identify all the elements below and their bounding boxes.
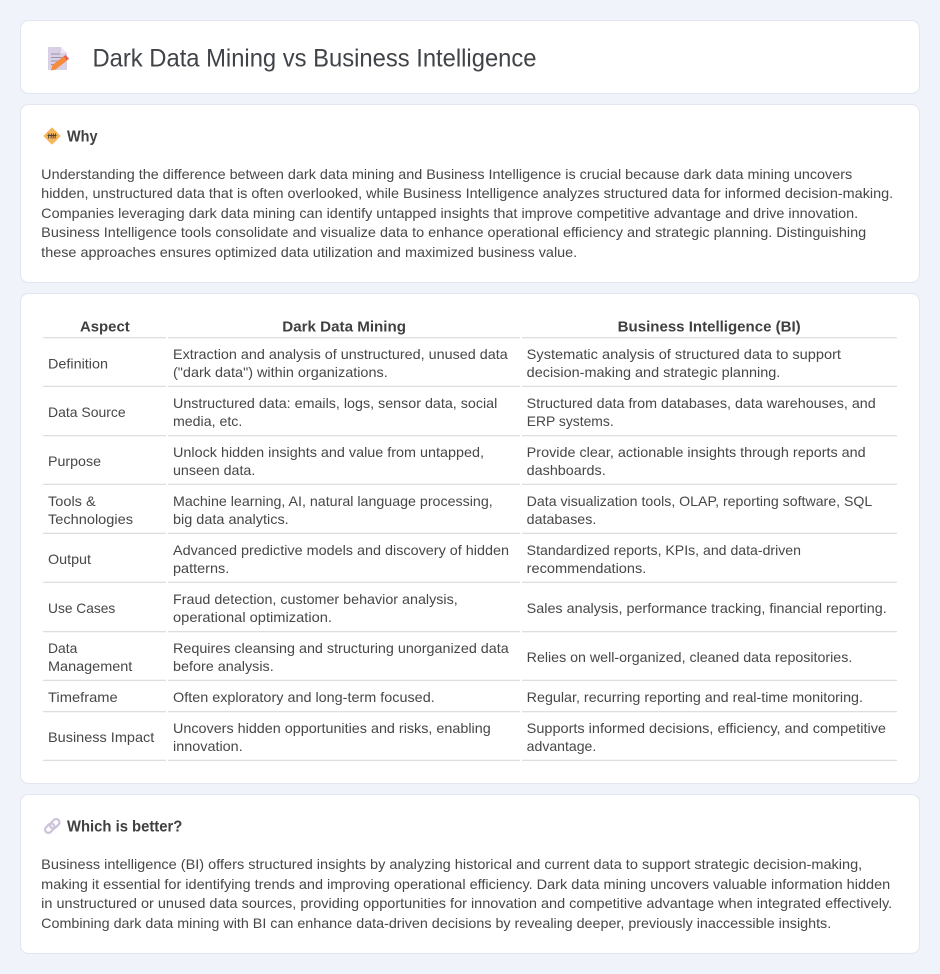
row: use cases <box>43 591 897 632</box>
row: definition <box>43 346 897 387</box>
row: definition: Definition <box>48 355 108 371</box>
row: timeframe: Regular, recurring reporting and real-time monitoring. <box>527 689 863 705</box>
row: use cases: Fraud detection, customer behavior analysis, <box>173 591 458 607</box>
icon: chain link <box>44 818 61 834</box>
row: data source: Data Source <box>48 404 126 420</box>
row: use cases: Sales analysis, performance tracking, financial reporting. <box>527 600 887 616</box>
row: output <box>43 542 897 583</box>
row: data management: Data <box>48 640 78 656</box>
row: purpose: unseen data. <box>173 462 255 478</box>
row: business impact <box>43 720 897 761</box>
row: definition: Extraction and analysis of unstructured, unused data <box>173 346 508 362</box>
row: data source <box>43 395 897 436</box>
text block: which is better paragraph: Business intelligence (BI) offers structured insights by analyzing historical and current data to support strategic decision-making, <box>41 856 862 872</box>
row: output: Standardized reports, KPIs, and data-driven <box>527 542 801 558</box>
heading: why: Why <box>67 129 98 146</box>
text block: which is better paragraph <box>41 856 892 931</box>
row: data source: media, etc. <box>173 413 242 429</box>
row: purpose: dashboards. <box>527 462 606 478</box>
text block: why paragraph: hidden, unstructured data that is often overlooked, while Business Intelligence analyzes structured data for informed decision-making. <box>41 185 893 201</box>
row: output: recommendations. <box>527 560 646 576</box>
row: tools and technologies: big data analytics. <box>173 511 289 527</box>
panel: title card <box>20 20 920 94</box>
text block: why paragraph: these approaches ensures optimized data utilization and maximized business value. <box>41 244 577 260</box>
row: purpose: Unlock hidden insights and value from untapped, <box>173 444 484 460</box>
text block: why paragraph <box>41 166 893 260</box>
row: purpose <box>43 444 897 485</box>
row: tools and technologies: databases. <box>527 511 596 527</box>
row: data management: Relies on well-organized, cleaned data repositories. <box>527 649 852 665</box>
row: data source: Structured data from databases, data warehouses, and <box>527 395 876 411</box>
row: tools and technologies: Machine learning, AI, natural language processing, <box>173 493 493 509</box>
row: timeframe <box>43 689 897 712</box>
row: tools and technologies <box>43 493 897 534</box>
table header: Business Intelligence (BI) <box>618 320 801 336</box>
row: output: Output <box>48 551 91 567</box>
row: purpose: Provide clear, actionable insights through reports and <box>527 444 866 460</box>
text block: which is better paragraph: in unstructured or unused data sources, providing opportunities for innovation and competitive advantage when integrated effectively. <box>41 895 892 911</box>
heading: which is better: Which is better? <box>67 819 182 836</box>
row: data management <box>43 640 897 681</box>
row: tools and technologies: Tools & <box>48 493 96 509</box>
row: business impact: Business Impact <box>48 729 154 745</box>
row: data source: Unstructured data: emails, logs, sensor data, social <box>173 395 497 411</box>
row: business impact: Supports informed decisions, efficiency, and competitive <box>527 720 886 736</box>
row: output: patterns. <box>173 560 229 576</box>
row: business impact: Uncovers hidden opportunities and risks, enabling <box>173 720 491 736</box>
panel: why <box>20 104 920 282</box>
row: timeframe: Timeframe <box>48 689 118 705</box>
table header <box>43 320 897 338</box>
row: timeframe: Often exploratory and long-term focused. <box>173 689 435 705</box>
row: definition: decision-making and strategic planning. <box>527 364 780 380</box>
panel: comparison table <box>20 294 920 784</box>
panel: which is better <box>20 794 920 954</box>
row: output: Advanced predictive models and discovery of hidden <box>173 542 509 558</box>
row: data management: before analysis. <box>173 658 274 674</box>
text block: why paragraph: Understanding the difference between dark data mining and Business Intelligence is crucial because dark data mining uncovers <box>41 166 852 182</box>
row: data source: ERP systems. <box>527 413 614 429</box>
row: business impact: advantage. <box>527 738 596 754</box>
row: tools and technologies: Data visualization tools, OLAP, reporting software, SQL <box>527 493 873 509</box>
icon: document with pencil <box>48 47 69 70</box>
text block: which is better paragraph: Combining dark data mining with BI can enhance data-driven decisions by revealing deeper, previously inaccessible insights. <box>41 915 831 931</box>
table header: Aspect <box>80 320 130 336</box>
row: tools and technologies: Technologies <box>48 511 133 527</box>
row: use cases: operational optimization. <box>173 609 332 625</box>
row: data management: Requires cleansing and structuring unorganized data <box>173 640 509 656</box>
row: purpose: Purpose <box>48 453 101 469</box>
text block: why paragraph: Business Intelligence tools consolidate and visualize data to enhance operational efficiency and strategic planning. Distinguishing <box>41 224 866 240</box>
title: Dark Data Mining vs Business Intelligence <box>92 45 536 73</box>
row: data management: Management <box>48 658 132 674</box>
row: business impact: innovation. <box>173 738 243 754</box>
text block: which is better paragraph: making it essential for identifying trends and improving operational efficiency. Dark data mining uncovers valuable information hidden <box>41 876 890 892</box>
row: use cases: Use Cases <box>48 600 115 616</box>
table header: Dark Data Mining <box>282 320 406 336</box>
row: definition: Systematic analysis of structured data to support <box>527 346 841 362</box>
icon: warning diamond <box>44 128 60 144</box>
row: definition: ("dark data") within organizations. <box>173 364 388 380</box>
text block: why paragraph: Companies leveraging dark data mining can identify untapped insights that improve competitive advantage and drive innovation. <box>41 205 858 221</box>
